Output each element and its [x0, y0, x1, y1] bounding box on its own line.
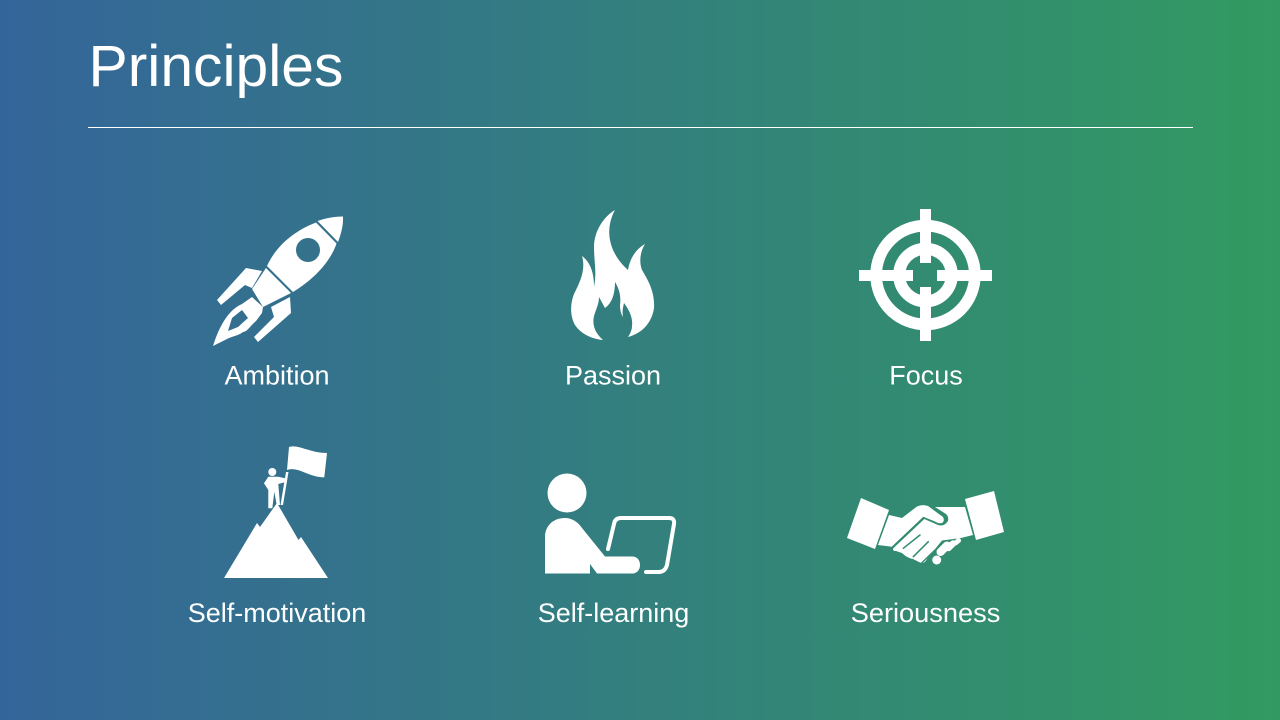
label: Self-motivation: Self-motivation: [188, 598, 366, 628]
title: Principles: [88, 34, 343, 99]
label: Focus: Focus: [889, 360, 963, 390]
label: Seriousness: Seriousness: [851, 597, 1000, 628]
icon: rocket: [213, 216, 343, 346]
icon: flame: [571, 210, 654, 340]
icon: handshake: [847, 491, 1004, 564]
label: Self-learning: Self-learning: [538, 598, 689, 628]
label: Ambition: Ambition: [224, 360, 330, 390]
icon: person at laptop: [545, 474, 674, 574]
icon: target crosshair: [859, 209, 992, 341]
icon: person with flag on mountain: [224, 446, 328, 578]
label: Passion: Passion: [565, 360, 661, 390]
